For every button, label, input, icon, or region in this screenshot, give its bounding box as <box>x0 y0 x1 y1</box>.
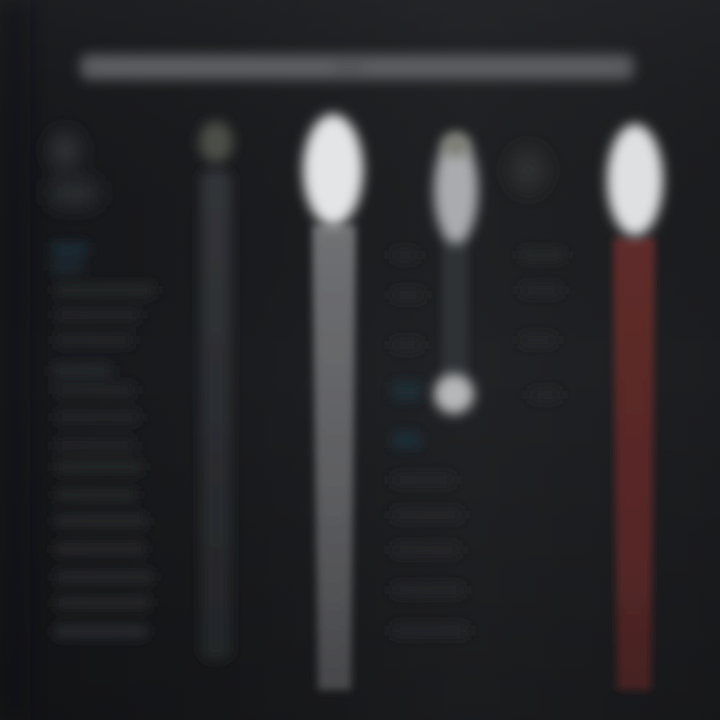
icon: column 4 header <box>510 148 546 192</box>
head tip <box>442 133 470 157</box>
column 1: icon and text rows <box>50 132 155 637</box>
bar 2: grey shaft with white head <box>303 114 363 690</box>
title bar <box>80 54 634 80</box>
shaft <box>442 230 468 400</box>
text rows: column 1 <box>52 243 155 637</box>
icon: column 1 header <box>50 132 98 206</box>
text rows: column 4 <box>520 250 565 400</box>
column 4: icon and text rows <box>510 148 565 400</box>
head <box>607 124 663 236</box>
bar 1: dark shaft with olive head <box>199 121 233 660</box>
knob <box>434 374 474 414</box>
shaft <box>201 170 231 660</box>
head <box>303 114 363 226</box>
shaft <box>312 225 356 690</box>
bar 4: red shaft with white head <box>607 124 663 690</box>
column 3: text rows <box>392 250 468 636</box>
shaft <box>613 238 655 690</box>
bar 3: short dark shaft with white head and lower knob <box>434 133 478 414</box>
head <box>199 121 233 163</box>
head <box>434 136 478 244</box>
